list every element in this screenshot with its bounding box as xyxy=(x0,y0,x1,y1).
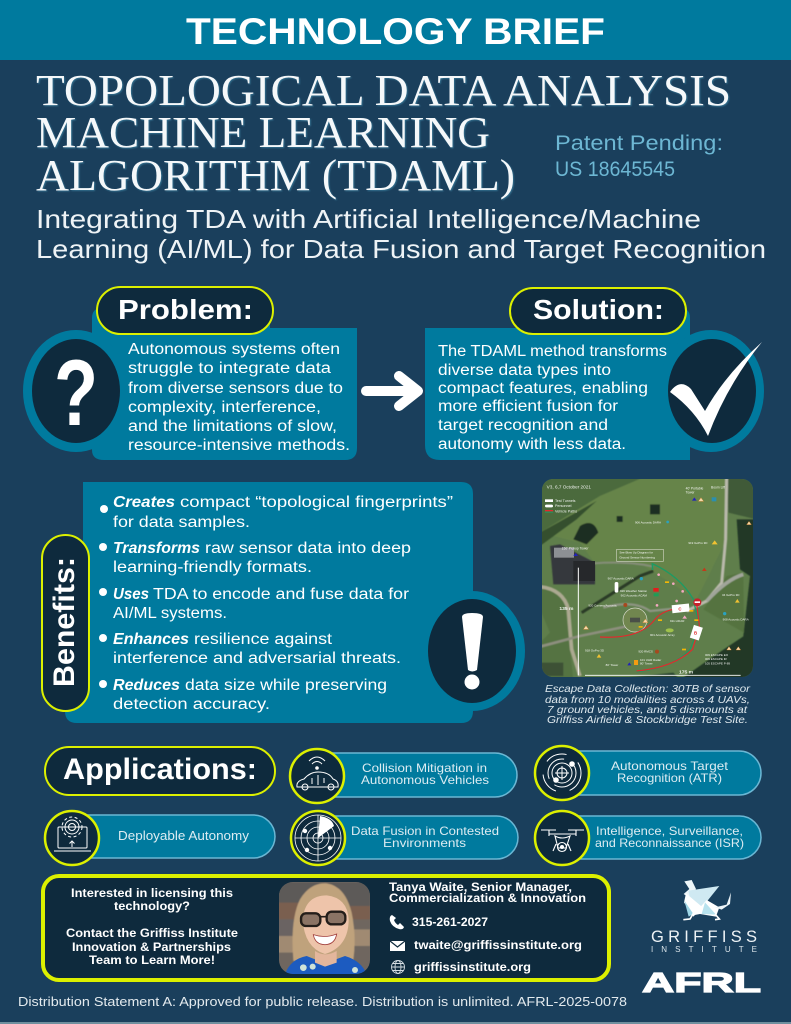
icon: drone xyxy=(535,811,589,865)
heading: benefits: Benefits: xyxy=(48,557,81,687)
benefits list: TDA to encode and fuse data for xyxy=(153,586,409,603)
heading: applications xyxy=(45,747,275,795)
heading: problem xyxy=(97,287,273,334)
aerial test site map: 907 Acoustic DARA xyxy=(608,577,634,581)
licensing call to action xyxy=(66,888,238,967)
problem text xyxy=(128,341,350,454)
header banner: TECHNOLOGY BRIEF xyxy=(186,11,605,52)
aerial test site map: B xyxy=(694,630,697,635)
panel: problem xyxy=(23,287,357,460)
aerial test site map: 80' Tower xyxy=(640,662,653,666)
aerial test site map: 150' Pickup Tower xyxy=(562,546,589,550)
aerial test site map: 902 Acoustic ACAM xyxy=(621,594,647,598)
solution text: more efficient fusion for xyxy=(438,398,618,415)
application: deployable autonomy xyxy=(45,811,275,865)
benefits list: learning-friendly formats. xyxy=(113,559,312,576)
application: ISR xyxy=(535,811,761,865)
aerial test site map: 908 Acoustic DARA xyxy=(723,617,749,621)
title: ALGORITHM (TDAML) xyxy=(36,151,515,200)
application: data fusion: Environments xyxy=(383,836,466,850)
aerial test site map: Personnel xyxy=(555,504,572,508)
aerial test site map: 105 ESCAPE P-89 xyxy=(705,662,730,666)
panel: solution xyxy=(425,288,764,460)
benefits list: Reduces xyxy=(113,677,180,694)
arrow xyxy=(366,376,418,406)
application: ISR: and Reconnaissance (ISR) xyxy=(595,836,744,850)
subtitle: Learning (AI/ML) for Data Fusion and Target Recognition xyxy=(36,234,766,264)
solution text: The TDAML method transforms xyxy=(438,343,667,360)
licensing call to action: Innovation & Partnerships xyxy=(72,942,231,954)
licensing call to action: Contact the Griffiss Institute xyxy=(66,928,238,940)
problem text: struggle to integrate data xyxy=(128,360,331,377)
map caption: 7 ground vehicles, and 5 dismounts at xyxy=(547,704,748,716)
aerial test site map: V3, 6,7 October 2021 xyxy=(547,484,591,489)
heading: benefits xyxy=(42,535,89,711)
logo: griffiss institute xyxy=(651,880,757,954)
panel: benefits xyxy=(42,482,525,723)
benefits list: interference and adversarial threats. xyxy=(113,650,401,667)
application: autonomous target recognition: Recognition (ATR) xyxy=(617,771,722,785)
licensing call to action: technology? xyxy=(114,901,190,913)
aerial test site map: 175 m xyxy=(679,669,694,675)
benefits list: data size while preserving xyxy=(185,677,387,694)
benefits list: resilience against xyxy=(194,631,333,648)
contact name: Commercialization & Innovation xyxy=(389,893,586,905)
icon: connected car xyxy=(290,749,344,803)
licensing call to action: Interested in licensing this xyxy=(71,888,233,900)
aerial test site map: Ground Sensor Numbering xyxy=(619,556,655,560)
aerial test site map: See Blow Up Diagram for xyxy=(619,550,653,554)
aerial test site map: 901 Acoustic Array xyxy=(650,633,675,637)
benefits list: Uses xyxy=(113,586,149,603)
contact name xyxy=(389,882,586,905)
application: data fusion: Data Fusion in Contested xyxy=(351,824,499,838)
application: data fusion xyxy=(291,811,518,865)
title xyxy=(36,66,731,200)
benefits list: raw sensor data into deep xyxy=(205,540,411,557)
aerial test site map: 101 UHR Radar xyxy=(640,658,661,662)
problem text: Autonomous systems often xyxy=(128,341,340,358)
benefits list: compact “topological fingerprints” xyxy=(180,494,453,511)
benefits list xyxy=(99,494,453,713)
icon: radar xyxy=(291,811,345,865)
application: autonomous target recognition: Autonomous Target xyxy=(611,759,729,773)
solution text: target recognition and xyxy=(438,417,608,434)
aerial test site map: 920 RMCS xyxy=(638,650,653,654)
aerial test site map: 911 LIDAR xyxy=(670,619,685,623)
aerial test site map: Test Tunnels xyxy=(555,499,576,503)
solution text: autonomy with less data. xyxy=(438,436,626,453)
title: TOPOLOGICAL DATA ANALYSIS xyxy=(36,66,731,115)
icon: laptop gear xyxy=(45,811,99,865)
icon: question mark xyxy=(32,339,120,445)
patent note xyxy=(555,132,723,181)
application: autonomous target recognition xyxy=(535,746,761,800)
aerial test site map: Vehicle Paths xyxy=(555,510,577,514)
subtitle xyxy=(36,204,766,264)
licensing call to action: Team to Learn More! xyxy=(89,955,215,967)
benefits list: Creates xyxy=(113,494,175,511)
contact name: Tanya Waite, Senior Manager, xyxy=(389,882,572,894)
heading: solution: Solution: xyxy=(533,294,664,325)
application: collision mitigation: Collision Mitigation in xyxy=(362,761,487,775)
patent note: Patent Pending: xyxy=(555,132,723,155)
application: deployable autonomy: Deployable Autonomy xyxy=(118,829,250,843)
application: ISR: Intelligence, Surveillance, xyxy=(596,824,743,838)
benefits list: Enhances xyxy=(113,631,189,648)
icon: question mark: ? xyxy=(54,340,98,445)
aerial test site map: 926 Weather Station xyxy=(620,589,647,593)
email: twaite@griffissinstitute.org xyxy=(414,940,582,952)
map caption: data from 10 modalities across 4 UAVs, xyxy=(545,694,750,706)
application: collision mitigation: Autonomous Vehicles xyxy=(361,773,489,787)
phone: 315-261-2027 xyxy=(412,917,488,929)
problem text: resource-intensive methods. xyxy=(128,437,350,454)
aerial test site map: 906 Acoustic DARA xyxy=(635,521,661,525)
heading: applications: Applications: xyxy=(63,753,257,786)
map caption: Escape Data Collection: 30TB of sensor xyxy=(545,683,751,695)
aerial test site map: 918 GoPro 3D xyxy=(585,648,605,652)
website: griffissinstitute.org xyxy=(414,962,531,974)
heading: problem: Problem: xyxy=(118,294,253,325)
application: collision mitigation xyxy=(290,749,517,803)
problem text: complexity, interference, xyxy=(128,399,321,416)
logo: griffiss institute: INSTITUTE xyxy=(651,945,757,954)
patent note: US 18645545 xyxy=(555,158,675,181)
aerial test site map: 40' Portable xyxy=(686,486,703,490)
benefits list: AI/ML systems. xyxy=(113,605,227,622)
portrait photo xyxy=(278,882,370,974)
solution text: diverse data types into xyxy=(438,362,611,379)
aerial test site map: 135 m xyxy=(559,606,574,612)
logo: AFRL: AFRL xyxy=(642,967,761,998)
benefits list: Transforms xyxy=(113,540,200,557)
aerial test site map: 80' Tower xyxy=(606,663,618,667)
aerial test site map: C xyxy=(678,606,681,611)
icon: target xyxy=(535,746,589,800)
aerial test site map: 920 Camera/Acoustic xyxy=(588,603,617,607)
aerial test site map: 34 GoPro 3D xyxy=(722,593,740,597)
website xyxy=(392,960,531,974)
panel: contact box xyxy=(43,876,609,980)
benefits list: detection accuracy. xyxy=(113,696,270,713)
icon: exclamation mark xyxy=(419,591,525,711)
map caption: Griffiss Airfield & Stockbridge Test Site. xyxy=(547,714,748,726)
solution text: compact features, enabling xyxy=(438,380,648,397)
subtitle: Integrating TDA with Artificial Intelligence/Machine xyxy=(36,204,701,234)
aerial test site map: 009 ESCAPE IR xyxy=(705,657,728,661)
icon: check mark xyxy=(668,339,762,443)
logo: griffiss institute: GRIFFISS xyxy=(651,928,757,946)
title: MACHINE LEARNING xyxy=(36,108,490,157)
header banner xyxy=(0,0,791,60)
map caption xyxy=(545,683,751,726)
phone xyxy=(390,915,488,929)
heading: solution xyxy=(510,288,686,334)
solution text xyxy=(438,343,667,453)
aerial test site map: 009 ESCAPE EO xyxy=(705,653,729,657)
aerial test site map: Boom Lift xyxy=(711,486,725,490)
benefits list: for data samples. xyxy=(113,514,250,531)
aerial test site map: 919 GoPro 3D xyxy=(688,541,708,545)
aerial test site map: Tower xyxy=(686,491,695,495)
aerial test site map xyxy=(540,476,757,680)
problem text: from diverse sensors due to xyxy=(128,380,343,397)
distribution statement: Distribution Statement A: Approved for public release. Distribution is unlimited. AFRL-2025-0078 xyxy=(18,995,627,1009)
problem text: and the limitations of slow, xyxy=(128,418,337,435)
